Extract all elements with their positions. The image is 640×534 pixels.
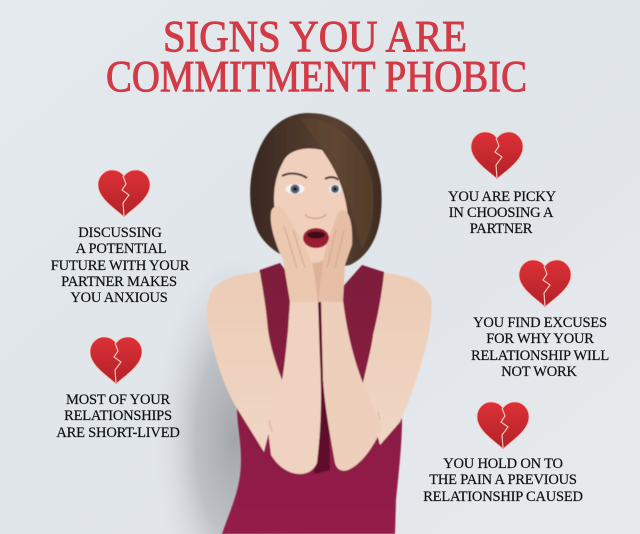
item: future anxiety: PARTNER MAKES [61, 274, 177, 290]
item: excuses: RELATIONSHIP WILL [471, 348, 609, 364]
item: short-lived relationships: ARE SHORT-LIVED [56, 425, 180, 441]
icon: broken heart [471, 132, 523, 179]
wall shadow [130, 230, 340, 534]
elbow creases [269, 412, 380, 432]
item: short-lived relationships: RELATIONSHIPS [64, 408, 172, 424]
item: future anxiety: DISCUSSING [78, 225, 162, 241]
item: excuses: FOR WHY YOUR [486, 331, 594, 347]
item: holding on to pain: YOU HOLD ON TO [443, 456, 563, 472]
item: short-lived relationships: MOST OF YOUR [66, 392, 171, 408]
hair back [250, 113, 382, 268]
neck [298, 240, 338, 300]
photo: surprised woman [207, 113, 432, 534]
icon: broken heart [98, 170, 150, 217]
dress shade between arms [314, 300, 330, 474]
nose [305, 214, 326, 218]
item: holding on to pain: THE PAIN A PREVIOUS [429, 472, 577, 488]
icon: broken heart [519, 260, 571, 307]
item: excuses: NOT WORK [501, 364, 578, 380]
item: holding on to pain: RELATIONSHIP CAUSED [423, 489, 583, 505]
eyes [286, 184, 341, 194]
item: future anxiety: A POTENTIAL [76, 241, 166, 257]
left upper arm [207, 272, 282, 452]
finger lines [284, 226, 344, 268]
item: picky partner: IN CHOOSING A [449, 205, 554, 221]
item: excuses [471, 260, 609, 380]
right hand [318, 210, 352, 302]
title: SIGNS YOU ARE [163, 12, 467, 61]
item: picky partner: PARTNER [470, 221, 533, 237]
item: short-lived relationships [56, 337, 180, 441]
brows [282, 174, 338, 180]
hair highlight [300, 118, 374, 248]
dress [222, 263, 402, 534]
item: holding on to pain [423, 402, 583, 505]
title [106, 12, 527, 101]
right upper arm [363, 273, 432, 445]
item: future anxiety [51, 170, 190, 306]
left hand [271, 206, 318, 302]
item: excuses: YOU FIND EXCUSES [473, 315, 607, 331]
icon: broken heart [477, 402, 529, 449]
icon: broken heart [90, 337, 142, 384]
item: future anxiety: FUTURE WITH YOUR [51, 258, 190, 274]
face [274, 148, 348, 263]
title: COMMITMENT PHOBIC [106, 52, 527, 101]
item: picky partner [448, 132, 557, 237]
left forearm [268, 300, 321, 474]
item: picky partner: YOU ARE PICKY [448, 189, 557, 205]
right forearm [321, 300, 381, 471]
item: future anxiety: YOU ANXIOUS [70, 290, 168, 306]
mouth [303, 228, 329, 248]
